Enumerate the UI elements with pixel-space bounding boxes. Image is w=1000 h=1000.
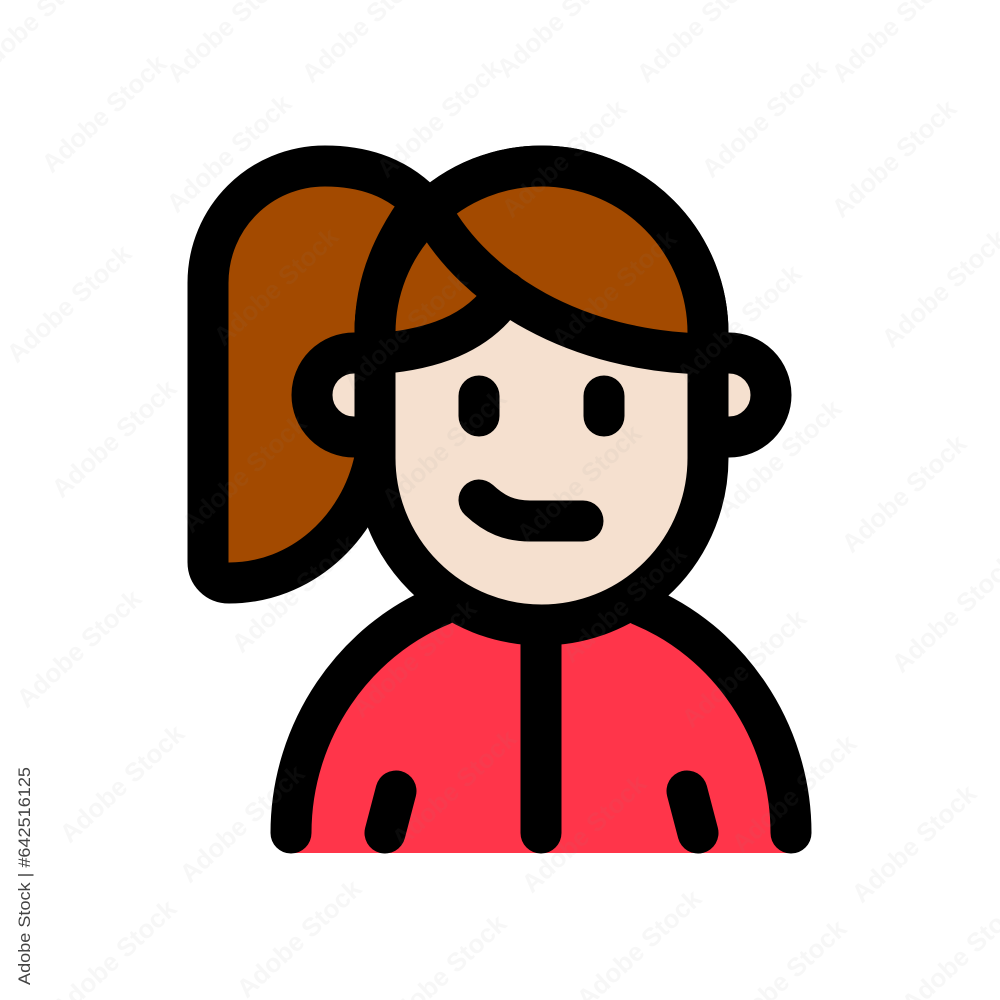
- watermark: Adobe Stock: [846, 778, 983, 909]
- watermark: Adobe Stock: [1, 238, 138, 369]
- hair fringe: [375, 166, 708, 354]
- icon: girl with ponytail: [208, 166, 791, 853]
- watermark: Adobe Stock: [711, 393, 848, 524]
- watermark: Adobe Stock: [11, 583, 148, 714]
- watermark: Adobe Stock: [556, 538, 693, 669]
- watermark: Adobe Stock: [226, 528, 363, 659]
- watermark: Adobe Stock: [36, 48, 173, 179]
- watermark: Adobe Stock: [161, 88, 298, 219]
- jacket: [291, 605, 791, 853]
- right ear: [687, 353, 771, 437]
- watermark: Adobe Stock: [46, 373, 183, 504]
- watermark: Adobe Stock: [231, 873, 368, 1000]
- watermark: Adobe Stock: [386, 723, 523, 854]
- eyes: [479, 396, 604, 416]
- watermark: Adobe Stock: [671, 258, 808, 389]
- watermark: Adobe Stock: [371, 53, 508, 184]
- watermark: Adobe Stock: [376, 383, 513, 514]
- watermark: Adobe Stock: [836, 428, 973, 559]
- watermark: Adobe Stock: [496, 93, 633, 224]
- watermark: Adobe Stock: [174, 758, 311, 889]
- watermark: Adobe Stock: [826, 93, 963, 224]
- watermark: Adobe Stock: [696, 53, 833, 184]
- mouth: [479, 500, 583, 521]
- left ear: [312, 353, 396, 437]
- watermark: Adobe Stock: [208, 221, 345, 352]
- watermark: Adobe Stock: [346, 593, 483, 724]
- watermark: Adobe Stock: [337, 265, 474, 396]
- watermark: Adobe Stock: [676, 603, 813, 734]
- watermark: Adobe Stock: [546, 223, 683, 354]
- stock id: Adobe Stock | #642516125: [15, 767, 34, 985]
- ponytail: [208, 166, 422, 583]
- watermark: Adobe Stock: [726, 728, 863, 859]
- head: [375, 166, 708, 625]
- watermark: Adobe Stock: [511, 418, 648, 549]
- watermark: Adobe Stock: [176, 408, 313, 539]
- watermark: Adobe Stock: [516, 768, 653, 899]
- watermark: Adobe Stock: [54, 718, 191, 849]
